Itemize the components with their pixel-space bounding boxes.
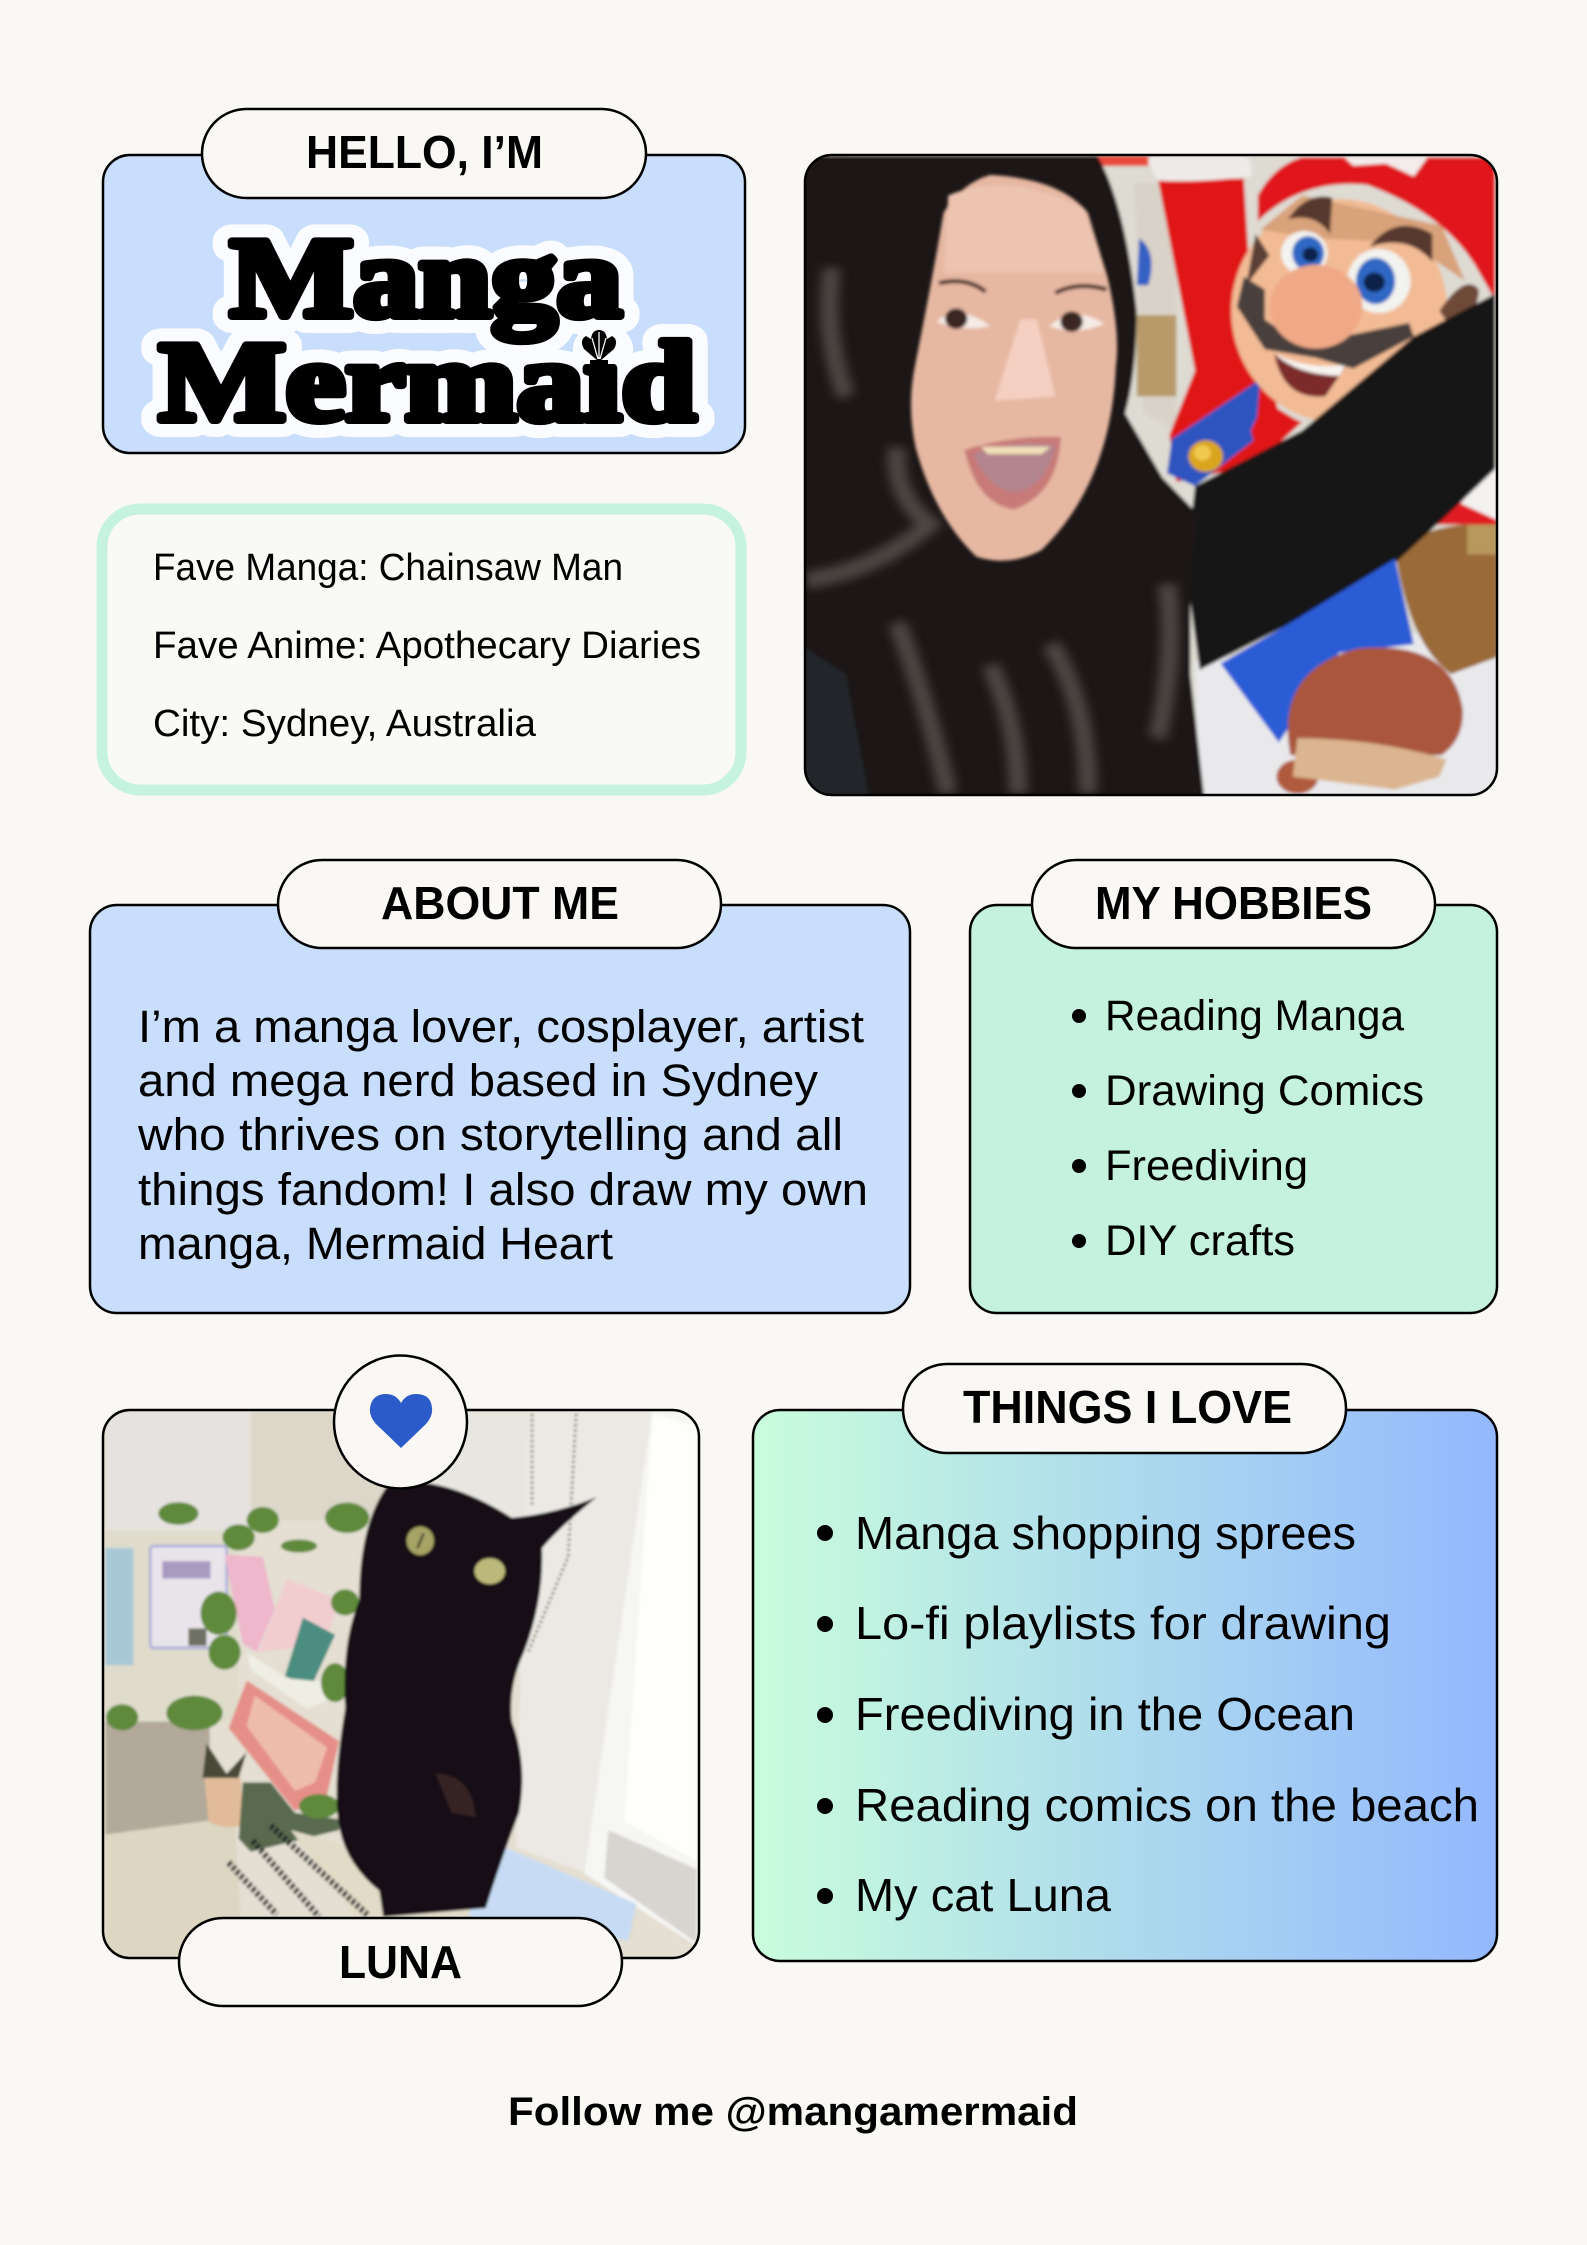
name logo: Manga — [230, 214, 622, 341]
pill: about me heading — [278, 860, 721, 948]
hobbies list: Drawing Comics — [1105, 1067, 1424, 1115]
name logo: Mermaid — [159, 318, 696, 445]
about me text — [137, 1001, 868, 1269]
hobbies list — [1072, 992, 1424, 1265]
panel: favourites: Fave Manga: Chainsaw Man — [153, 547, 623, 589]
things I love list: Manga shopping sprees — [855, 1507, 1356, 1559]
about me text: who thrives on storytelling and all — [137, 1109, 843, 1160]
about me text: and mega nerd based in Sydney — [138, 1055, 819, 1106]
photo: Luna the cat — [98, 1356, 705, 2006]
pill: Luna caption — [179, 1918, 622, 2006]
panel: name card — [103, 109, 745, 453]
pill: hello heading: HELLO, I’M — [306, 126, 543, 178]
pill: Luna caption: LUNA — [339, 1936, 462, 1988]
icon: shell — [578, 324, 618, 364]
panel: favourites: City: Sydney, Australia — [153, 703, 537, 745]
pill: about me heading: ABOUT ME — [381, 877, 619, 929]
pill: hello heading — [202, 109, 646, 198]
panel: things I love — [753, 1364, 1497, 1961]
name logo: Mermaid — [159, 318, 696, 445]
pill: things I love heading — [903, 1364, 1346, 1453]
footer: follow me: Follow me @mangamermaid — [508, 2090, 1078, 2134]
icon: heart badge — [334, 1356, 467, 1488]
things I love list: Reading comics on the beach — [855, 1779, 1479, 1831]
panel: my hobbies — [970, 860, 1497, 1313]
panel: favourites — [102, 509, 741, 790]
about me text: things fandom! I also draw my own — [138, 1164, 868, 1215]
about me text: I’m a manga lover, cosplayer, artist — [138, 1001, 865, 1052]
things I love list: Lo-fi playlists for drawing — [855, 1597, 1391, 1649]
name logo: Manga — [230, 214, 622, 341]
things I love list: My cat Luna — [855, 1869, 1111, 1921]
pill: my hobbies heading: MY HOBBIES — [1095, 877, 1372, 929]
hobbies list: DIY crafts — [1105, 1217, 1295, 1265]
hobbies list: Freediving — [1105, 1142, 1308, 1190]
things I love list: Freediving in the Ocean — [855, 1688, 1355, 1740]
things I love list — [817, 1507, 1479, 1921]
panel: about me — [90, 860, 910, 1313]
name logo — [159, 214, 696, 445]
pill: things I love heading: THINGS I LOVE — [963, 1381, 1292, 1433]
photo: selfie with Mario — [799, 149, 1502, 798]
pill: my hobbies heading — [1032, 860, 1435, 948]
about me text: manga, Mermaid Heart — [138, 1218, 613, 1269]
panel: favourites: Fave Anime: Apothecary Diaries — [153, 625, 701, 667]
hobbies list: Reading Manga — [1105, 992, 1404, 1040]
